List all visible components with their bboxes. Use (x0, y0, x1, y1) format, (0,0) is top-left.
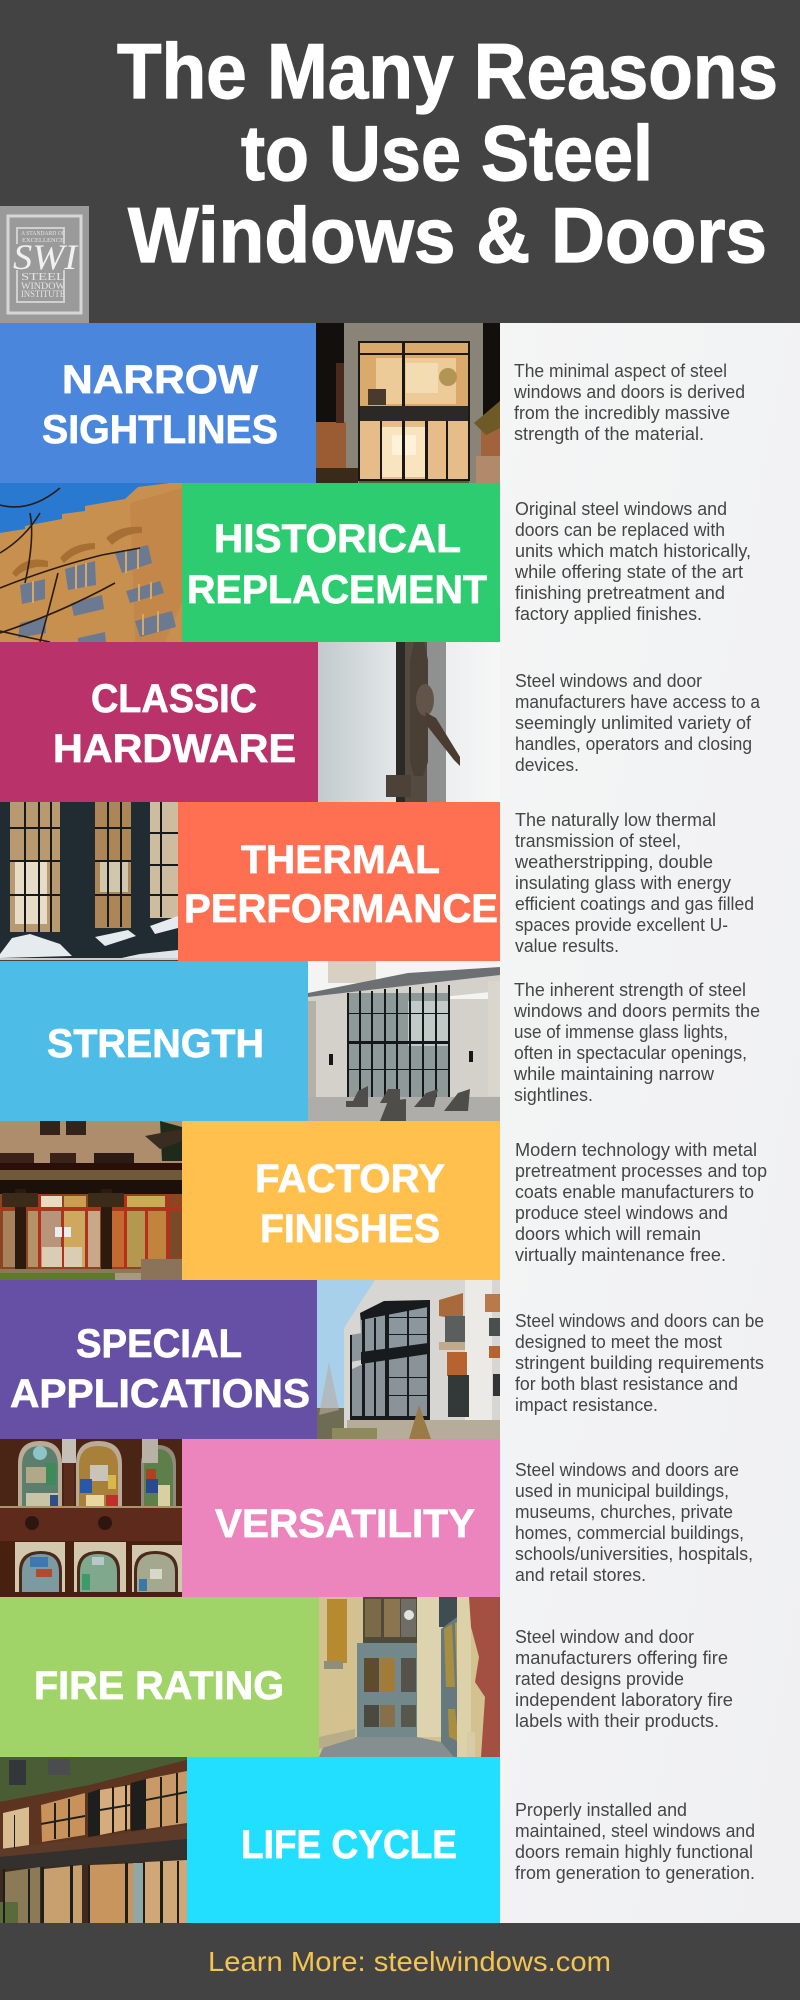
description: versatility (515, 1460, 753, 1585)
description: fire rating: rated designs provide (515, 1669, 684, 1689)
heading: factory finishes: FINISHES (260, 1207, 440, 1251)
heading: historical replacement: REPLACEMENT (187, 568, 487, 612)
description: narrow sightlines: strength of the material. (514, 424, 704, 444)
description: special applications: designed to meet the most (515, 1332, 722, 1352)
description: life cycle: Properly installed and (515, 1800, 687, 1820)
colour block: factory finishes (182, 1121, 500, 1280)
logo: Steel Window Institute: WINDOW (21, 281, 66, 291)
heading: strength: STRENGTH (47, 1022, 264, 1066)
description: versatility: schools/universities, hospitals, (515, 1544, 753, 1564)
photo: stained glass windows (0, 1439, 182, 1597)
description: life cycle: maintained, steel windows and (515, 1821, 755, 1841)
photo: modern white building (317, 1280, 500, 1439)
description: thermal performance: value results. (515, 936, 619, 956)
description: historical replacement: finishing pretreatment and (515, 583, 725, 603)
row: factory finishes (0, 1121, 767, 1280)
colour block: classic hardware (0, 642, 318, 802)
description: versatility: used in municipal buildings, (515, 1481, 729, 1501)
description: versatility: homes, commercial buildings, (515, 1523, 744, 1543)
heading: versatility: VERSATILITY (215, 1502, 475, 1546)
description: thermal performance: transmission of steel, (515, 831, 681, 851)
footer (0, 1923, 800, 2000)
heading: classic hardware (53, 677, 296, 771)
description: historical replacement: while offering state of the art (514, 562, 743, 582)
colour block: versatility (182, 1439, 500, 1597)
description: factory finishes: produce steel windows and (515, 1203, 728, 1223)
row: versatility (0, 1439, 753, 1597)
heading: thermal performance: THERMAL (241, 838, 440, 882)
photo: stone house with red frames (0, 1121, 182, 1280)
description: thermal performance: The naturally low thermal (515, 810, 716, 830)
logo: Steel Window Institute: A STANDARD OF (21, 231, 66, 237)
title: Windows & Doors (128, 191, 767, 279)
heading: special applications (10, 1322, 310, 1416)
description: classic hardware: devices. (515, 755, 579, 775)
colour block: historical replacement (182, 483, 500, 642)
row: narrow sightlines (0, 323, 745, 483)
description: versatility: Steel windows and doors are (515, 1460, 739, 1480)
description: factory finishes: pretreatment processes and top (515, 1161, 767, 1181)
heading: thermal performance: PERFORMANCE (184, 887, 498, 931)
description: thermal performance: weatherstripping, double (514, 852, 713, 872)
heading: factory finishes (255, 1157, 445, 1251)
title (117, 27, 778, 279)
photo: tall window wall with chairs (308, 961, 500, 1121)
photo: brick storefront with ivy (0, 1757, 187, 1923)
colour block: life cycle (187, 1757, 500, 1923)
photo: brick entry with steel door (319, 1597, 500, 1757)
description: narrow sightlines: The minimal aspect of steel (514, 361, 727, 381)
row: strength (0, 961, 760, 1121)
description: classic hardware: seemingly unlimited variety of (515, 713, 752, 733)
description: strength: The inherent strength of steel (514, 980, 746, 1000)
description: factory finishes (515, 1140, 767, 1265)
colour block: strength (0, 961, 308, 1121)
logo: Steel Window Institute (0, 206, 89, 323)
description: strength: sightlines. (514, 1085, 593, 1105)
heading: thermal performance (184, 838, 498, 931)
heading: life cycle: LIFE CYCLE (241, 1823, 457, 1867)
description: factory finishes: Modern technology with metal (515, 1140, 757, 1160)
description: versatility: and retail stores. (515, 1565, 646, 1585)
photo: townhouse at dusk (316, 323, 500, 483)
heading: special applications: SPECIAL (76, 1322, 242, 1366)
description: special applications: impact resistance. (515, 1395, 658, 1415)
row: life cycle (0, 1757, 755, 1923)
description: special applications: for both blast resistance and (515, 1374, 738, 1394)
description: thermal performance: spaces provide excellent U- (515, 915, 728, 935)
description: thermal performance (514, 810, 754, 956)
photo: window handle (318, 642, 500, 802)
colour block: special applications (0, 1280, 317, 1439)
description: factory finishes: virtually maintenance free. (515, 1245, 726, 1265)
footer link text: Learn More: steelwindows.com (208, 1946, 611, 1977)
row: special applications (0, 1280, 764, 1439)
heading: classic hardware: HARDWARE (53, 727, 296, 771)
logo: Steel Window Institute: STEEL (21, 272, 65, 283)
description: life cycle: from generation to generation. (515, 1863, 755, 1883)
description: historical replacement: Original steel windows and (515, 499, 727, 519)
description: fire rating: independent laboratory fire (515, 1690, 733, 1710)
logo: Steel Window Institute: EXCELLENCE (22, 238, 64, 244)
description: historical replacement: units which match historically, (515, 541, 751, 561)
description: strength: often in spectacular openings, (514, 1043, 747, 1063)
description: narrow sightlines: from the incredibly massive (514, 403, 730, 423)
description: special applications: stringent building requirements (515, 1353, 764, 1373)
heading: special applications: APPLICATIONS (10, 1372, 310, 1416)
description: narrow sightlines (513, 361, 745, 444)
heading: narrow sightlines: NARROW (62, 358, 258, 402)
heading: historical replacement (187, 517, 487, 612)
description: historical replacement: factory applied finishes. (515, 604, 702, 624)
title: to Use Steel (241, 109, 653, 197)
description: narrow sightlines: windows and doors is derived (513, 382, 745, 402)
description: strength: use of immense glass lights, (514, 1022, 728, 1042)
colour block: fire rating (0, 1597, 319, 1757)
description: factory finishes: doors which will remain (515, 1224, 701, 1244)
description: classic hardware: manufacturers have access to a (515, 692, 761, 712)
description: special applications (515, 1311, 764, 1415)
logo: Steel Window Institute: INSTITUTE (21, 289, 65, 299)
description: factory finishes: coats enable manufacturers to (515, 1182, 754, 1202)
description: fire rating: manufacturers offering fire (515, 1648, 728, 1668)
description: historical replacement (514, 499, 751, 624)
description: strength: windows and doors permits the (513, 1001, 760, 1021)
row: historical replacement (0, 483, 751, 642)
description: versatility: museums, churches, private (515, 1502, 733, 1522)
description: life cycle: doors remain highly functional (515, 1842, 753, 1862)
photo: dark framed windows with snow (0, 802, 178, 960)
description: fire rating: labels with their products. (515, 1711, 719, 1731)
heading: historical replacement: HISTORICAL (214, 517, 461, 561)
heading: narrow sightlines: SIGHTLINES (42, 408, 278, 452)
colour block: narrow sightlines (0, 323, 316, 483)
description: thermal performance: insulating glass with energy (515, 873, 731, 893)
description: thermal performance: efficient coatings and gas filled (515, 894, 754, 914)
description: life cycle (515, 1800, 755, 1883)
description: special applications: Steel windows and doors can be (515, 1311, 764, 1331)
heading: classic hardware: CLASSIC (91, 677, 257, 721)
row: fire rating (0, 1597, 733, 1757)
description: strength (513, 980, 760, 1105)
heading: narrow sightlines (42, 358, 278, 452)
description: fire rating (515, 1627, 733, 1731)
description: strength: while maintaining narrow (513, 1064, 715, 1084)
logo: Steel Window Institute: SWI (13, 237, 79, 277)
header band (0, 0, 800, 323)
description: historical replacement: doors can be replaced with (515, 520, 725, 540)
colour block: thermal performance (178, 802, 500, 961)
description: fire rating: Steel window and door (515, 1627, 694, 1647)
description column background (500, 323, 800, 1923)
description: classic hardware: Steel windows and door (515, 671, 702, 691)
photo: gothic stone building (0, 483, 182, 642)
description: classic hardware: handles, operators and closing (515, 734, 752, 754)
description: classic hardware (515, 671, 761, 775)
row: classic hardware (0, 642, 761, 802)
heading: fire rating: FIRE RATING (34, 1664, 284, 1708)
heading: factory finishes: FACTORY (255, 1157, 445, 1201)
row: thermal performance (0, 802, 754, 961)
